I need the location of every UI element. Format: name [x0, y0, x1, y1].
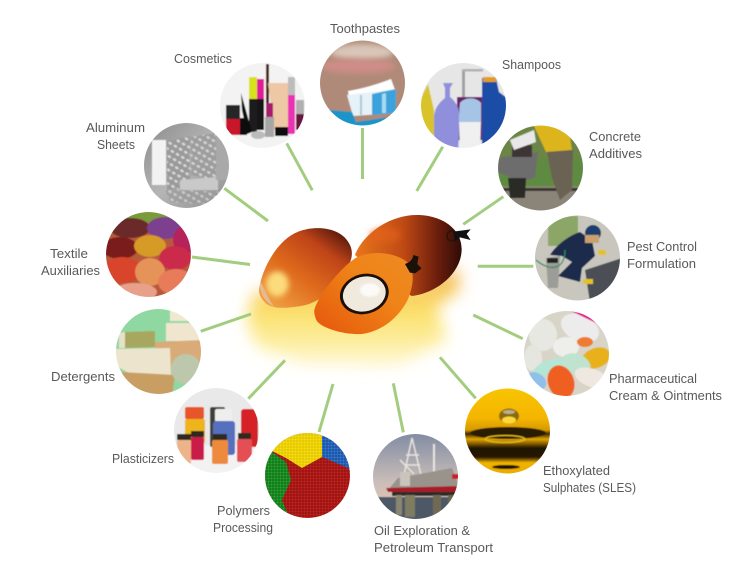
photo: pest control: [535, 216, 620, 300]
label: Polymers Processing: Processing: [213, 521, 273, 535]
label: Pharmaceutical Cream & Ointments: Pharmaceutical: [609, 372, 697, 386]
halved fruit: [314, 253, 422, 334]
right fruit: [355, 215, 471, 296]
photo: polymer granules: [265, 433, 350, 518]
photo: detergent soaps: [116, 309, 201, 394]
label: Concrete Additives: Concrete: [589, 130, 641, 144]
photo: oil drop (ethoxylated sulphates): [465, 388, 550, 474]
label: Oil Exploration & Petroleum Transport: Oil Exploration &: [374, 524, 471, 538]
photo: offshore oil platform: [373, 434, 458, 519]
label: Aluminum Sheets: Aluminum: [86, 121, 145, 135]
photo: shampoos: [421, 63, 506, 148]
label: Ethoxylated Sulphates (SLES): Sulphates (SLES): [543, 481, 636, 495]
label: Concrete Additives: Additives: [589, 147, 642, 161]
label: Pharmaceutical Cream & Ointments: [609, 372, 722, 403]
label: Pest Control Formulation: Pest Control: [627, 240, 697, 254]
label: Plasticizers: Plasticizers: [112, 452, 174, 466]
photo: pharmaceutical pills: [524, 311, 609, 396]
label: Shampoos: Shampoos: [502, 58, 561, 72]
label: Cosmetics: Cosmetics: [174, 52, 232, 66]
photo: aluminum sheets: [144, 123, 229, 208]
connector lines: [192, 128, 533, 432]
photo: toothpaste: [320, 40, 405, 126]
photo: plasticizer bottles: [174, 388, 259, 473]
label: Polymers Processing: [213, 504, 273, 535]
label: Oil Exploration & Petroleum Transport: [374, 524, 494, 555]
photo: textile yarn: [106, 212, 191, 297]
label: Oil Exploration & Petroleum Transport: Petroleum Transport: [374, 541, 494, 555]
left fruit: [259, 228, 352, 308]
label: Polymers Processing: Polymers: [217, 504, 270, 518]
label: Ethoxylated Sulphates (SLES): [543, 464, 636, 495]
label: Detergents: Detergents: [51, 370, 115, 384]
label: Textile Auxiliaries: [41, 247, 100, 278]
photo: concrete additives: [498, 126, 583, 210]
photo: cosmetics: [220, 63, 305, 148]
label: Concrete Additives: [589, 130, 642, 161]
label: Pest Control Formulation: [627, 240, 697, 271]
label: Pest Control Formulation: Formulation: [627, 257, 696, 271]
central image: palm fruits with oil: [247, 215, 471, 367]
oil puddle: [247, 267, 460, 367]
label: Toothpastes: Toothpastes: [330, 22, 400, 36]
label: Textile Auxiliaries: Textile: [50, 247, 88, 261]
label: Aluminum Sheets: Sheets: [97, 138, 135, 152]
label: Aluminum Sheets: [86, 121, 145, 152]
label: Ethoxylated Sulphates (SLES): Ethoxylated: [543, 464, 610, 478]
label: Textile Auxiliaries: Auxiliaries: [41, 264, 100, 278]
label: Pharmaceutical Cream & Ointments: Cream & Ointments: [609, 389, 722, 403]
